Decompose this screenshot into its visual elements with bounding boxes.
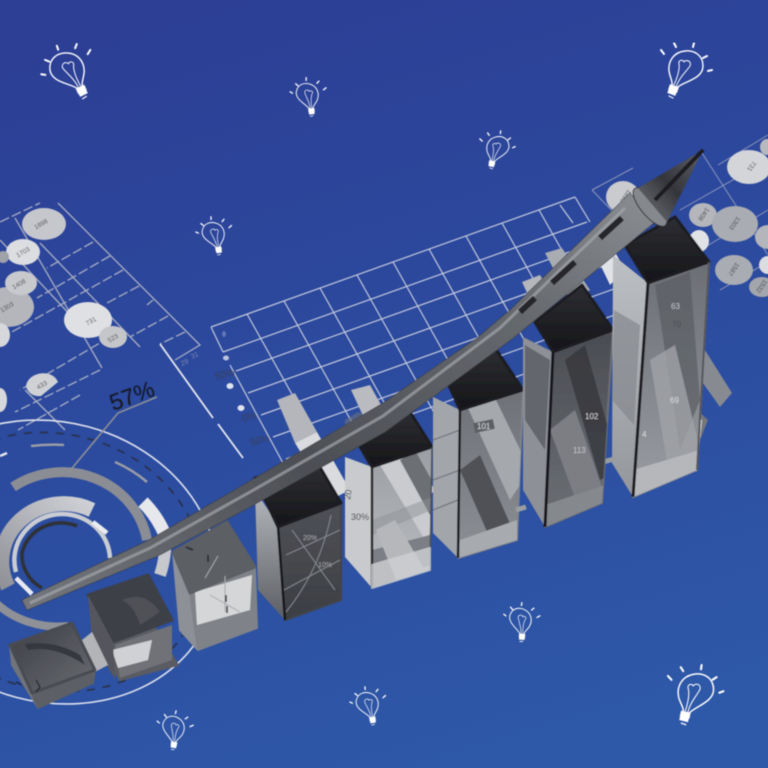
- bubble labels: 1898: [33, 218, 50, 231]
- bar 4 stripes: [546, 346, 608, 526]
- background bars: [277, 248, 732, 505]
- arrow shaft: [22, 193, 655, 610]
- bar 4 labels: 113: [573, 446, 586, 455]
- arrow collar: [628, 183, 672, 231]
- panel: centre grid chart: [160, 197, 732, 505]
- axis labels: 0%: [241, 411, 258, 425]
- axis labels: 31: [190, 351, 200, 361]
- percentage leader line: [68, 397, 157, 473]
- bar 3 label: 101: [477, 422, 491, 431]
- bar 5 labels: 69: [670, 396, 679, 405]
- bar 5 stripes: [633, 272, 700, 500]
- panel: radial ring chart: [0, 376, 250, 740]
- icon: lightbulb bottom left: [149, 705, 195, 753]
- percentage label: 57%: [106, 376, 158, 416]
- icon: lightbulb bottom right: [667, 663, 726, 726]
- bubble labels: 731: [85, 316, 98, 327]
- bubble labels: 523: [107, 333, 120, 344]
- right bubble labels: 1532: [754, 278, 768, 294]
- axis labels: [180, 351, 271, 449]
- axis markers: [222, 331, 244, 411]
- glass bar 4: [523, 285, 620, 530]
- right bubble labels: 1898: [618, 188, 632, 204]
- glass bar 3: [433, 348, 530, 560]
- ring: grey lower arc: [0, 602, 68, 627]
- cube connector: [82, 632, 108, 672]
- ring: white segments: [16, 522, 107, 594]
- bubble labels: 1703: [15, 246, 32, 259]
- ring: light wide arc: [2, 504, 92, 587]
- right grid lines: [592, 135, 768, 290]
- arrow head: [638, 150, 703, 222]
- dashed ring: [0, 400, 232, 724]
- bubble labels: 433: [36, 380, 49, 391]
- axis white line: [160, 344, 243, 458]
- right bubble labels: 1303: [727, 215, 741, 231]
- icon: lightbulb upper middle: [479, 129, 518, 170]
- axis labels: 50%: [249, 433, 271, 449]
- bar 4 labels: [573, 409, 602, 455]
- bubble labels: 1408: [11, 278, 28, 291]
- ring: dark inner arc: [22, 523, 77, 588]
- right bubbles: [606, 139, 768, 297]
- icon: lightbulb top left: [39, 43, 95, 102]
- bar 5 labels: 70: [672, 320, 681, 329]
- bubble chart grid: [0, 203, 200, 430]
- bar 2 labels: 20: [342, 489, 354, 500]
- glass cube 2: [88, 575, 178, 680]
- right bubble labels: 731: [745, 159, 757, 173]
- icon: lightbulb top centre: [285, 75, 327, 118]
- icon: lightbulb lower middle: [496, 598, 542, 645]
- glass cube 1: [10, 623, 95, 708]
- right bubble labels: [618, 159, 768, 294]
- bar 5 labels: 63: [671, 302, 680, 311]
- right bubble labels: 1587: [726, 261, 740, 277]
- icon: lightbulb bottom centre: [346, 685, 386, 727]
- bar 3 label: [473, 419, 495, 433]
- bar 5 labels: [642, 302, 681, 439]
- panel: left bubble chart: [0, 203, 200, 430]
- panel: right bubble chart: [592, 135, 768, 297]
- glass bar 1: [255, 467, 341, 620]
- axis labels: 50%: [214, 367, 236, 383]
- icon: lightbulb top right: [661, 43, 712, 98]
- bar 5 labels: 4: [642, 430, 647, 439]
- arrow: [22, 150, 703, 610]
- chart grid lines: [211, 197, 650, 480]
- glass bar 5: [612, 217, 709, 500]
- bubble labels: [0, 218, 120, 391]
- outer ring: [0, 384, 250, 740]
- thin accent arcs: [31, 445, 64, 446]
- bar 1 labels: 10%: [318, 562, 332, 569]
- glass cube 3: [173, 522, 257, 650]
- bar 3 stripes: [458, 400, 521, 558]
- bar 1 labels: [303, 535, 332, 569]
- ring: grey outer arc: [13, 472, 147, 540]
- bar 4 labels: 102: [585, 412, 599, 421]
- glass bar 2: [342, 412, 440, 590]
- bar connector: [516, 459, 614, 510]
- ring: pale segment: [14, 514, 110, 572]
- bar 2 stripes: [372, 453, 432, 587]
- ring: white right arc: [143, 502, 165, 535]
- axis labels: 29: [180, 358, 190, 368]
- right bubble labels: 1408: [696, 206, 710, 222]
- bar 1 labels: 20%: [303, 535, 317, 542]
- bar 2 labels: [342, 489, 369, 522]
- bubbles: [0, 208, 127, 412]
- bar 2 labels: 30%: [351, 512, 369, 522]
- icon: lightbulb left middle: [192, 215, 232, 257]
